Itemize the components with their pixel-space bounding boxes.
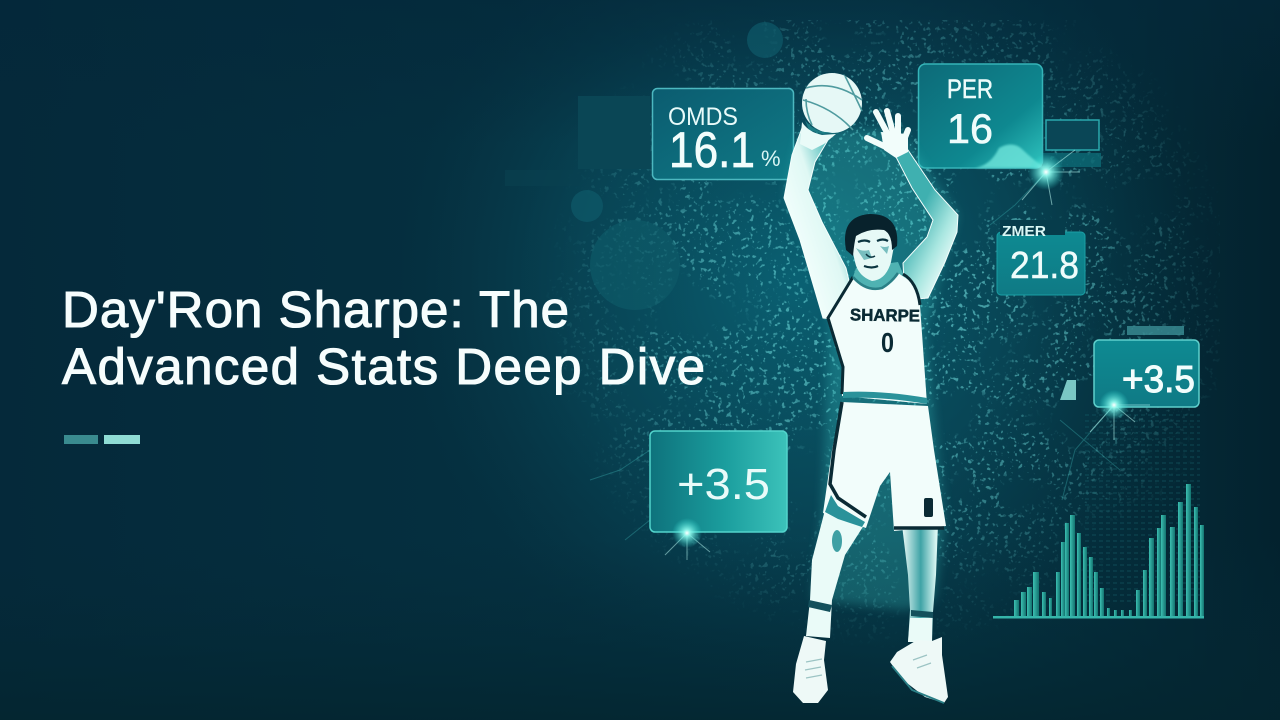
neck and shoulder shading bbox=[852, 262, 905, 292]
shooting hand bbox=[800, 122, 836, 150]
left leg bbox=[806, 510, 866, 638]
right shoe bbox=[890, 637, 948, 703]
stat card: +3.5 left bbox=[650, 431, 787, 560]
stat card: 16.1%: OMDS bbox=[668, 103, 738, 131]
jersey: SHARPE bbox=[850, 305, 920, 326]
stat card: +3.5 left: +3.5 bbox=[677, 460, 770, 509]
stat card: +3.5 right: +3.5 bbox=[1122, 359, 1195, 401]
left arm bbox=[784, 128, 850, 320]
jersey: 0 bbox=[881, 327, 894, 358]
basketball player bbox=[784, 73, 958, 703]
circuit lines bbox=[590, 172, 1120, 540]
stat card: 21.8 bbox=[997, 220, 1085, 295]
main title: Day'Ron Sharpe: The bbox=[62, 281, 569, 338]
stat card: PER: 16 bbox=[947, 105, 993, 152]
right leg bbox=[902, 525, 938, 642]
main title: Advanced Stats Deep Dive bbox=[62, 338, 705, 395]
stat card: 16.1% bbox=[652, 88, 794, 180]
jersey bbox=[828, 273, 927, 404]
stat card: PER: PER bbox=[947, 74, 993, 104]
head bbox=[845, 214, 897, 281]
right hand bbox=[867, 111, 908, 148]
title accent bar bbox=[64, 435, 140, 444]
stat card: 16.1%: % bbox=[761, 146, 781, 171]
stat card: 16.1%: 16.1 bbox=[669, 122, 755, 178]
dotted backdrop behind chart bbox=[1085, 412, 1200, 602]
stat card: +3.5 right bbox=[1090, 340, 1199, 440]
bar chart bbox=[993, 484, 1204, 618]
right arm bbox=[867, 111, 958, 300]
ghost data panels bbox=[505, 96, 1184, 400]
main title bbox=[62, 281, 705, 395]
basketball bbox=[802, 73, 862, 134]
particle field bbox=[540, 20, 1220, 680]
left shoe bbox=[793, 636, 828, 703]
decorative circles bbox=[571, 22, 783, 310]
stat card: 21.8: ZMER bbox=[1002, 223, 1046, 240]
player glow bbox=[785, 130, 958, 610]
stat card: PER bbox=[918, 64, 1080, 205]
stat card: 21.8: 21.8 bbox=[1010, 245, 1079, 287]
shorts bbox=[823, 402, 946, 531]
